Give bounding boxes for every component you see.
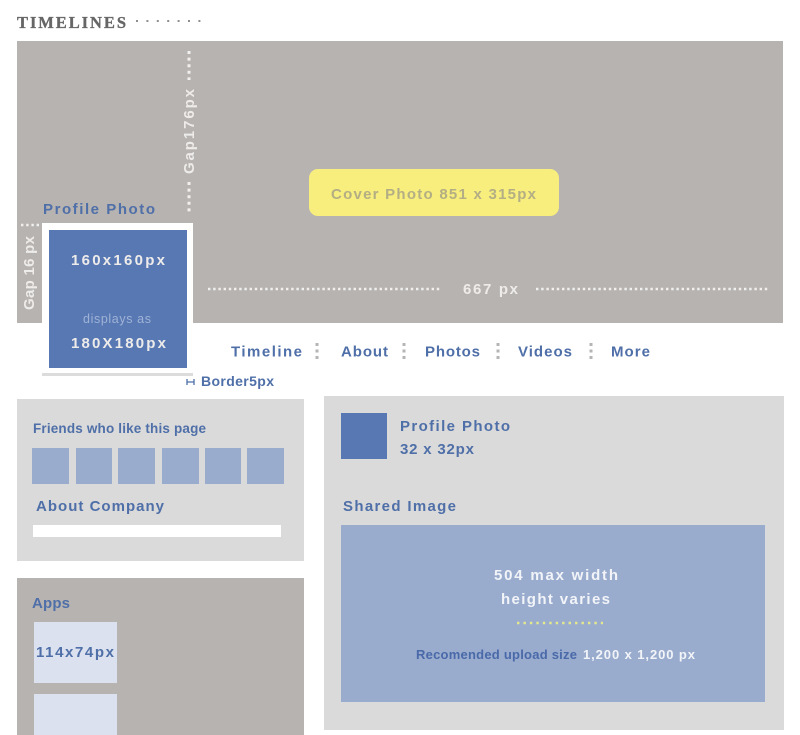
navigation tabs: Photos: [425, 344, 480, 360]
label: about company: About Company: [36, 498, 165, 515]
gap 176 measurement: Gap176px: [181, 88, 198, 174]
navigation tabs: [231, 343, 650, 360]
gap 16 measurement: Gap 16 px: [21, 235, 38, 310]
label: profile photo size: Profile Photo: [400, 418, 510, 435]
navigation tabs: Videos: [518, 344, 572, 360]
panel: post: [324, 396, 784, 730]
label: profile photo: Profile Photo: [43, 201, 155, 218]
panel: apps: [17, 578, 304, 735]
panel: cover photo: [17, 41, 783, 323]
panel: profile photo: [42, 223, 193, 376]
667 px measurement: 667 px: [463, 281, 519, 298]
callout: cover photo size: [309, 169, 559, 216]
shared image box: height varies: [501, 591, 610, 608]
label: border 5px: Border5px: [201, 373, 274, 389]
shared image box: 504 max width: [494, 567, 618, 584]
callout: cover photo size: Cover Photo 851 x 315px: [331, 186, 537, 203]
about text bar: [33, 525, 281, 537]
label: shared image: Shared Image: [343, 498, 456, 515]
app tile 1: [34, 622, 117, 683]
navigation tabs: Timeline: [231, 344, 302, 360]
friend thumbnails: [32, 448, 284, 484]
navigation tabs: More: [611, 344, 650, 360]
label: profile photo size: [400, 418, 510, 458]
icon: small profile photo: [341, 413, 387, 459]
panel: friends and about: [17, 399, 304, 561]
panel: profile photo: 160x160px: [71, 252, 166, 269]
panel: profile photo: 180X180px: [71, 335, 167, 352]
label: profile photo size: 32 x 32px: [400, 441, 475, 458]
title: Timelines: TIMELINES: [17, 13, 126, 32]
shared image box: 1,200 x 1,200 px: [583, 647, 696, 662]
shared image box: Recomended upload size: [416, 647, 577, 662]
panel: profile photo: displays as: [83, 312, 151, 326]
label: apps: Apps: [32, 595, 70, 612]
navigation tabs: About: [341, 344, 388, 360]
app tile 1: 114x74px: [36, 644, 115, 661]
shared image box: [341, 525, 765, 702]
label: friends who like this page: Friends who like this page: [33, 421, 206, 436]
app tile 2: [34, 694, 117, 735]
